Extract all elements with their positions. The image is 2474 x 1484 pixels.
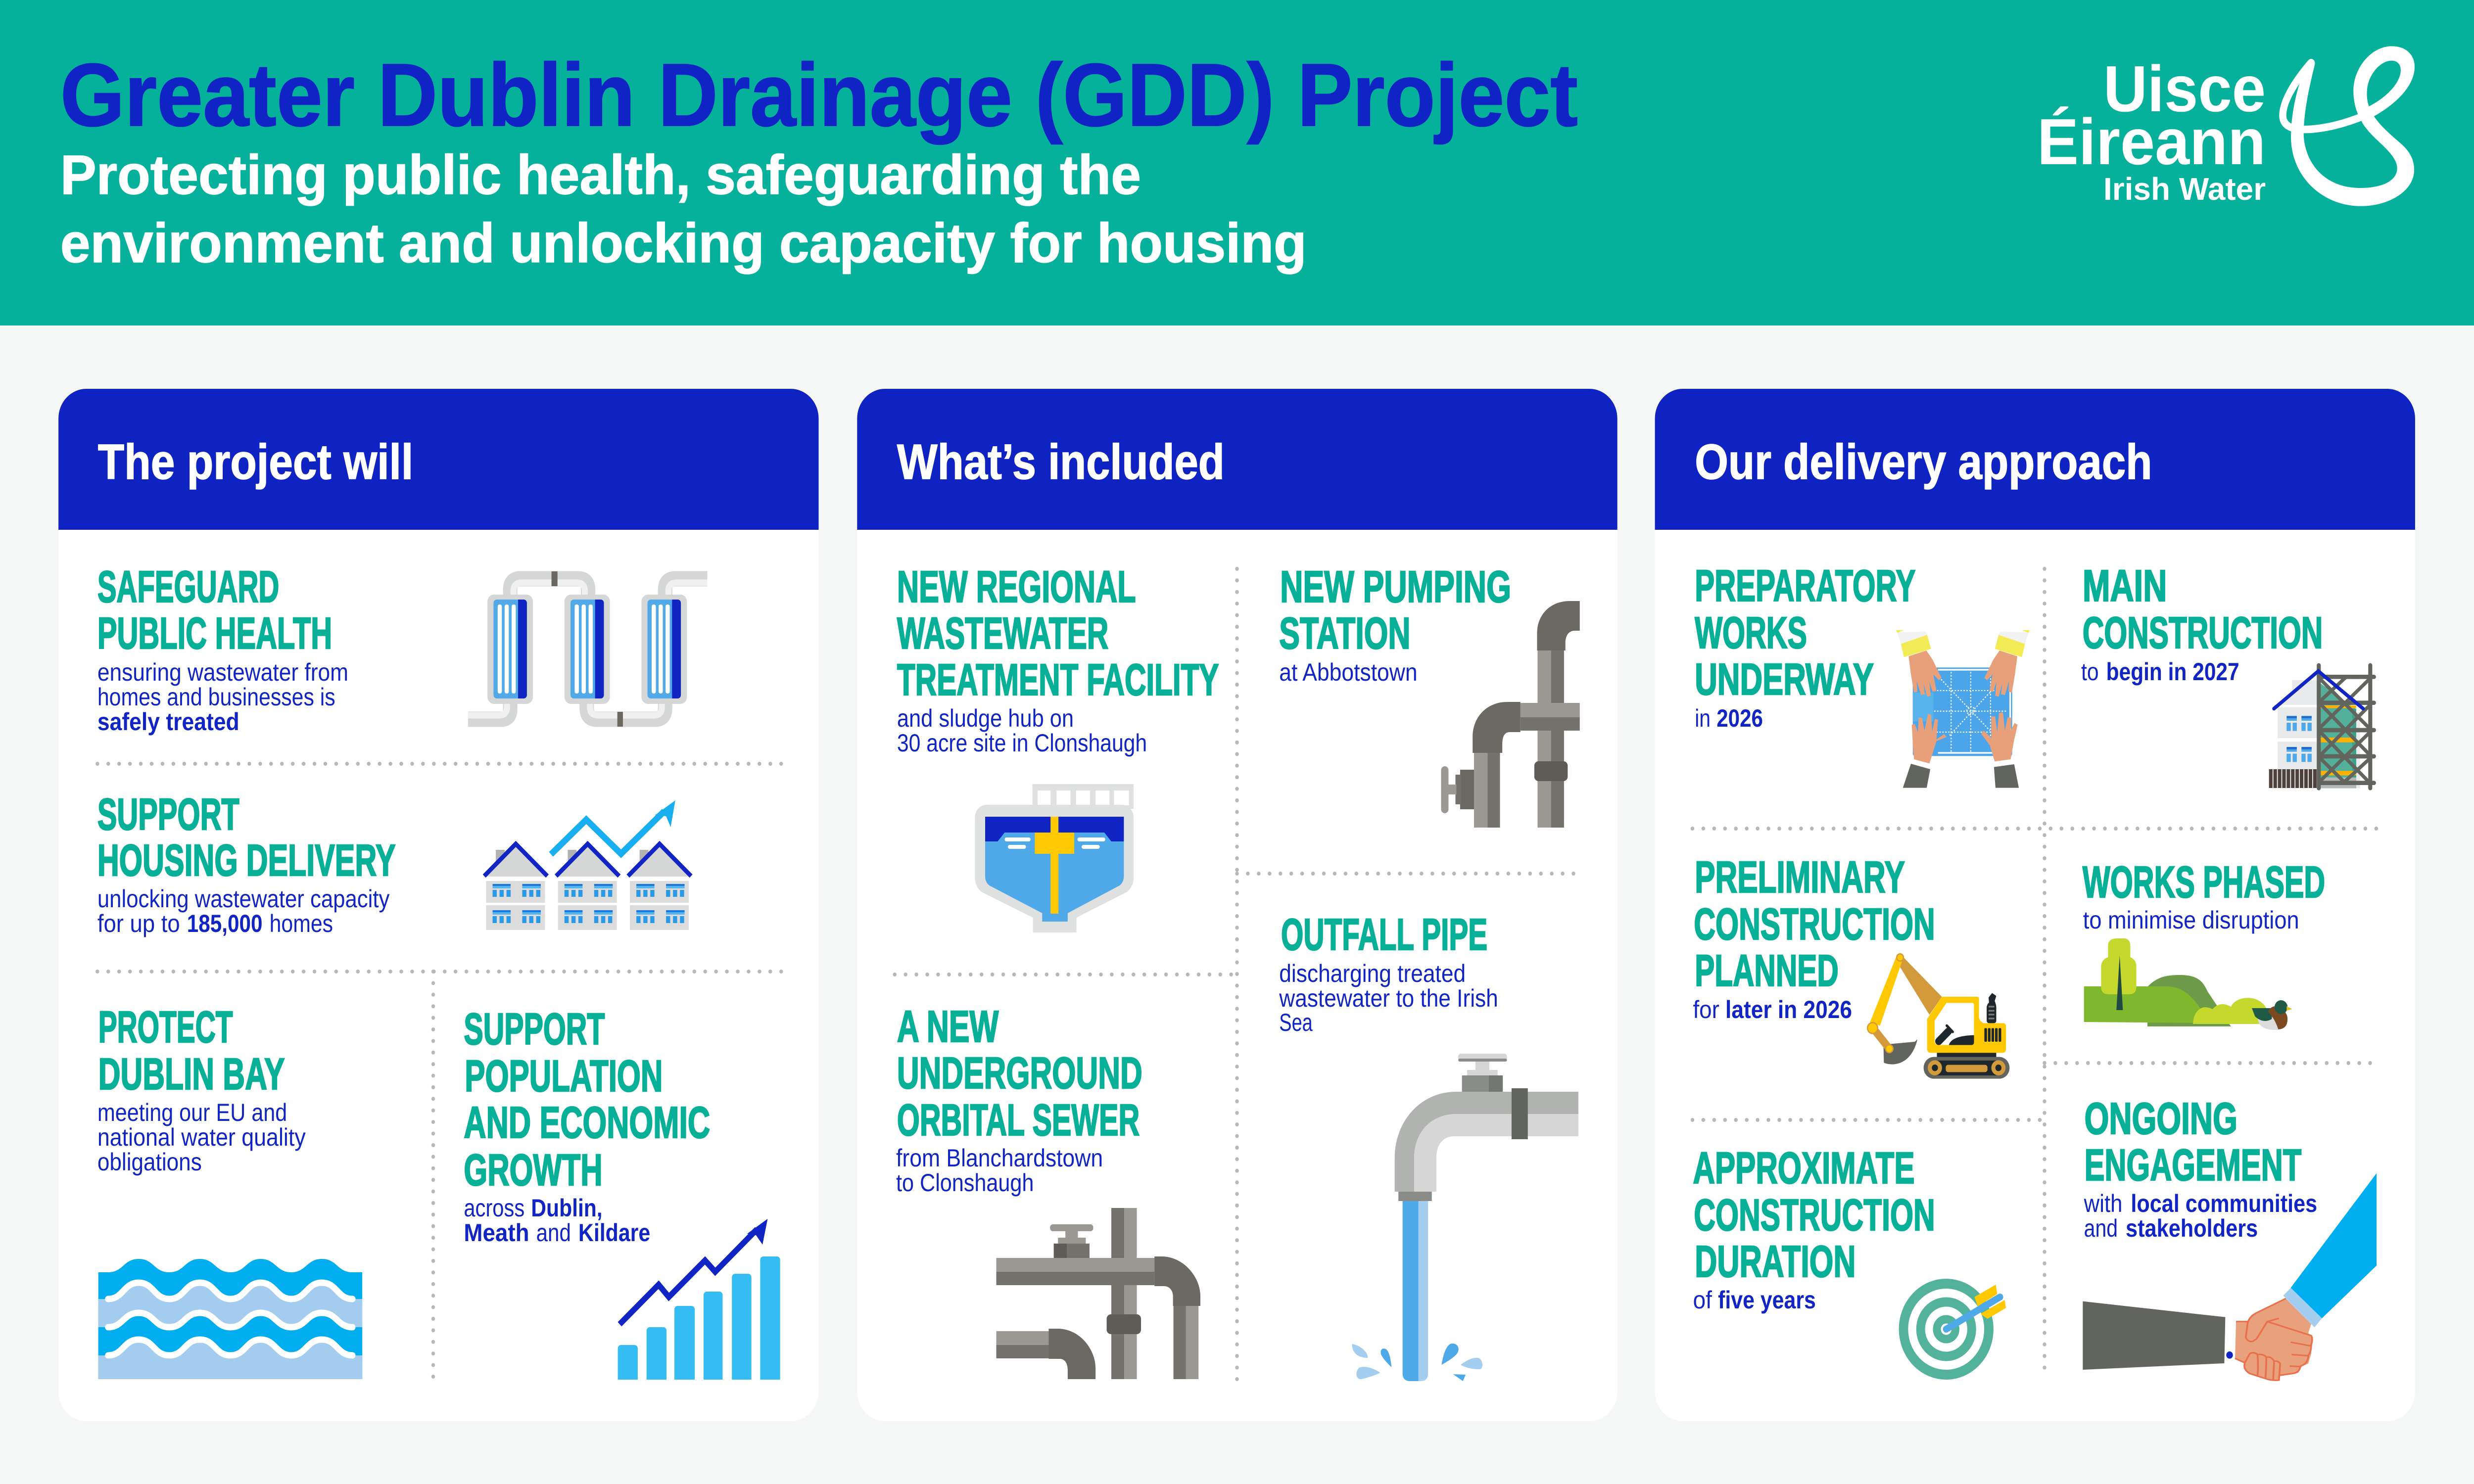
heading: POPULATION (465, 1052, 663, 1101)
item: safeguard public health (97, 562, 348, 736)
description: Meath (464, 1219, 529, 1247)
panel: what's included (857, 389, 1618, 1421)
description: for (1693, 996, 1719, 1023)
description: obligations (97, 1149, 202, 1176)
heading: WORKS PHASED (2083, 858, 2325, 907)
item: outfall pipe (1279, 910, 1498, 1036)
description (2084, 1190, 2317, 1242)
logo: Uisce Éireann Irish Water: Uisce (2103, 52, 2266, 126)
description: to minimise disruption (2083, 907, 2299, 934)
heading: PREPARATORY (1695, 561, 1915, 611)
heading (2085, 1094, 2301, 1190)
heading (464, 1005, 710, 1195)
description: 2026 (1716, 705, 1763, 732)
icon: pumping station pipes (1441, 601, 1580, 828)
panel header (857, 389, 1618, 530)
panel header (58, 389, 818, 530)
description: safely treated (97, 708, 239, 736)
icon: target with arrow (1903, 1284, 2006, 1375)
heading: NEW REGIONAL (897, 562, 1136, 612)
description: later in 2026 (1725, 996, 1852, 1023)
description: of (1693, 1287, 1712, 1314)
description: with (2084, 1190, 2122, 1217)
description (97, 885, 390, 937)
heading (97, 790, 396, 885)
heading (897, 562, 1219, 705)
description: homes (270, 910, 333, 937)
description: 30 acre site in Clonshaugh (897, 730, 1147, 757)
logo: Uisce Éireann Irish Water: Irish Water (2103, 172, 2266, 207)
icon: handshake (2083, 1173, 2377, 1381)
item: ongoing engagement (2084, 1094, 2317, 1242)
description (97, 1099, 306, 1176)
item: a new underground orbital sewer (896, 1002, 1142, 1197)
bar chart: rising bars and arrow (618, 1219, 780, 1380)
heading: SUPPORT (97, 790, 239, 839)
heading: HOUSING DELIVERY (97, 836, 396, 885)
item: approximate construction duration (1693, 1144, 1935, 1314)
description (896, 1145, 1103, 1197)
description: meeting our EU and (97, 1099, 287, 1126)
description: 185,000 (187, 910, 263, 937)
heading (1279, 562, 1511, 658)
heading: TREATMENT FACILITY (897, 655, 1219, 705)
heading: UNDERGROUND (897, 1049, 1142, 1098)
description: for up to (97, 910, 180, 937)
description: five years (1718, 1287, 1816, 1314)
heading (1695, 561, 1915, 704)
panel: our delivery approach (1655, 389, 2415, 1421)
heading: STATION (1279, 609, 1411, 658)
heading (98, 1003, 285, 1099)
description: across (464, 1195, 524, 1222)
description: discharging treated (1279, 960, 1466, 987)
panel header: What’s included (897, 434, 1225, 490)
description: national water quality (97, 1124, 306, 1151)
heading: OUTFALL PIPE (1281, 910, 1487, 960)
heading: ONGOING (2085, 1094, 2237, 1144)
heading: CONSTRUCTION (1694, 900, 1935, 949)
heading: PLANNED (1695, 946, 1839, 996)
item: new regional wastewater treatment facility (897, 562, 1219, 757)
heading: ORBITAL SEWER (897, 1096, 1140, 1145)
heading (897, 1002, 1142, 1145)
heading: APPROXIMATE (1693, 1144, 1915, 1193)
heading (1693, 1144, 1935, 1287)
heading: NEW PUMPING (1280, 562, 1511, 612)
item: protect Dublin Bay (97, 1003, 306, 1176)
heading: GROWTH (464, 1146, 603, 1195)
description: homes and businesses is (97, 684, 335, 711)
heading (97, 562, 332, 658)
item: new pumping station (1279, 562, 1511, 686)
description: unlocking wastewater capacity (97, 885, 390, 913)
subtitle: Protecting public health, safeguarding the (60, 144, 1141, 206)
icon: orbital sewer pipes (996, 1208, 1200, 1379)
description: at Abbotstown (1279, 659, 1418, 686)
heading: WASTEWATER (897, 609, 1108, 658)
panel: the project will (58, 389, 818, 1421)
panel header (1655, 389, 2415, 530)
description (1695, 705, 1763, 732)
icon: house under scaffold (2269, 665, 2374, 788)
heading: AND ECONOMIC (464, 1098, 710, 1148)
logo: Uisce Éireann Irish Water: Éireann (2037, 105, 2266, 179)
description: from Blanchardstown (896, 1145, 1103, 1172)
title: Greater Dublin Drainage (GDD) Project (60, 45, 1578, 144)
heading: PRELIMINARY (1695, 853, 1905, 902)
heading: PROTECT (98, 1003, 233, 1052)
heading: DUBLIN BAY (98, 1050, 285, 1099)
panel header: Our delivery approach (1695, 434, 2152, 490)
description: to (2081, 658, 2099, 686)
icon: excavator (1867, 953, 2009, 1079)
heading (2083, 561, 2323, 658)
description: wastewater to the Irish (1279, 985, 1498, 1012)
panel header: The project will (98, 434, 413, 490)
logo: Uisce Éireann Irish Water (2037, 46, 2415, 207)
item: preparatory works underway (1695, 561, 1915, 732)
icon: landscape with tree and duck (2084, 938, 2292, 1030)
heading: DURATION (1695, 1237, 1856, 1287)
icon: filtration units and pipes (468, 571, 708, 727)
description: begin in 2027 (2106, 658, 2239, 686)
heading: ENGAGEMENT (2085, 1141, 2301, 1190)
heading: PUBLIC HEALTH (97, 609, 332, 658)
item: support population and economic growth (464, 1005, 710, 1247)
description (464, 1195, 650, 1247)
item: main construction (2081, 561, 2323, 686)
subtitle (60, 144, 1307, 275)
icon: treatment tank (975, 784, 1134, 932)
icon: outfall tap with water (1352, 1054, 1578, 1381)
description: Kildare (578, 1219, 650, 1247)
heading: A NEW (897, 1002, 999, 1052)
heading: CONSTRUCTION (1694, 1191, 1935, 1240)
icon: houses with rising arrow (484, 800, 691, 930)
item: preliminary construction planned (1693, 853, 1935, 1023)
description: stakeholders (2126, 1215, 2258, 1242)
description: in (1695, 705, 1711, 732)
subtitle: environment and unlocking capacity for housing (60, 213, 1307, 275)
item: works phased (2083, 858, 2325, 934)
description: and sludge hub on (897, 705, 1074, 732)
heading: CONSTRUCTION (2083, 608, 2323, 658)
description (1279, 960, 1498, 1036)
description: and (2084, 1215, 2118, 1242)
heading (1694, 853, 1935, 996)
description: local communities (2131, 1190, 2317, 1217)
description: to Clonshaugh (896, 1169, 1034, 1197)
icon: water waves (98, 1259, 362, 1379)
heading: SAFEGUARD (97, 562, 279, 612)
heading: WORKS (1695, 608, 1807, 658)
description: Dublin, (531, 1195, 603, 1222)
description: ensuring wastewater from (97, 659, 348, 686)
description (97, 659, 348, 736)
heading: SUPPORT (464, 1005, 605, 1054)
description: and (536, 1219, 571, 1247)
description: Sea (1279, 1009, 1313, 1036)
item: support housing delivery (97, 790, 396, 937)
heading: MAIN (2083, 561, 2167, 611)
header banner (0, 0, 2474, 325)
heading: UNDERWAY (1695, 655, 1874, 704)
icon: hands on blueprint (1896, 630, 2030, 788)
description (897, 705, 1147, 757)
